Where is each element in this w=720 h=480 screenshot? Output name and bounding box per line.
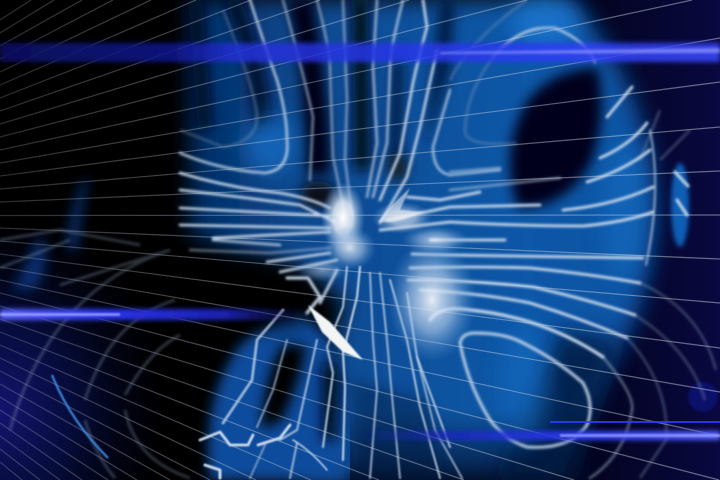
- lens flare: top band: [0, 43, 720, 62]
- lens flare: lower right band: [360, 421, 720, 440]
- contour lines: left cheek: [180, 173, 337, 313]
- contour lines: right cheek: [380, 87, 688, 478]
- face highlights: eyes, nose and mouth: [296, 182, 476, 362]
- head: blue mass: [190, 0, 689, 480]
- bright arc lower left: [52, 375, 108, 458]
- shading on the face: [187, 0, 647, 480]
- contour lines: forehead: [180, 0, 595, 223]
- lens flare: middle left band: [0, 309, 300, 320]
- faint figures left of the face: [12, 178, 88, 290]
- contour lines: chin and neck: [200, 267, 462, 478]
